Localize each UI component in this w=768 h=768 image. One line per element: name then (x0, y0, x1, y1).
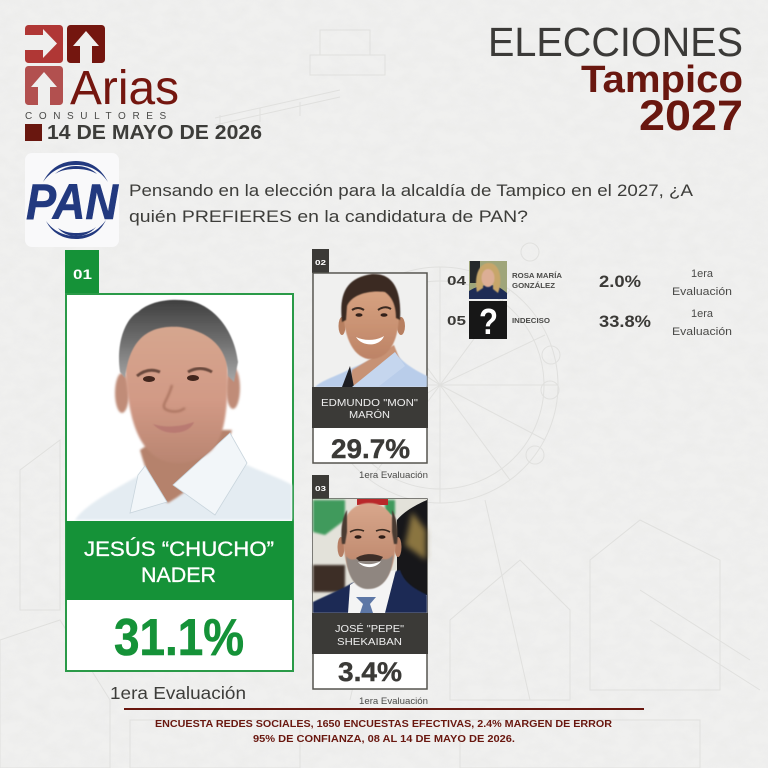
icon: up arrow tile (67, 25, 105, 63)
evaluation note: 1era Evaluación (110, 683, 246, 703)
evaluation note: 1era (691, 268, 714, 280)
card frame (313, 499, 427, 689)
evaluation note: 1era (691, 308, 714, 320)
survey question: quién PREFIERES en la candidatura de PAN? (129, 207, 528, 226)
portrait: José Shekaiban (313, 499, 427, 613)
row: candidate 04 (447, 261, 732, 299)
evaluation note: 1era Evaluación (359, 470, 428, 481)
row: undecided 05 (447, 301, 732, 342)
title: ELECCIONES (488, 19, 743, 65)
name band: EDMUNDO "MON" (321, 397, 418, 409)
rank tag 01: 01 (73, 266, 92, 282)
evaluation note: Evaluación (672, 286, 732, 298)
icon: light up arrow tile (25, 66, 63, 105)
footer methodology note: ENCUESTA REDES SOCIALES, 1650 ENCUESTAS EFECTIVAS, 2.4% MARGEN DE ERROR (155, 718, 612, 730)
icon: right arrow tile (25, 25, 63, 63)
name band: MARÓN (349, 408, 390, 421)
name: ROSA MARÍA (512, 271, 562, 280)
title: 2027 (639, 92, 743, 140)
rank tag 02: 02 (315, 258, 326, 267)
title (488, 19, 743, 140)
logo wordmark: Arias (70, 62, 179, 115)
portrait: Edmundo Marón (314, 274, 427, 387)
name band (66, 521, 293, 600)
PAN party logo: PAN (26, 174, 119, 230)
survey question: Pensando en la elección para la alcaldía de Tampico en el 2027, ¿A (129, 181, 694, 200)
rank tag 03 (312, 475, 329, 499)
panel: candidate 03 (312, 475, 428, 707)
evaluation note (672, 308, 732, 338)
footer methodology note: 95% DE CONFIANZA, 08 AL 14 DE MAYO DE 2026. (253, 733, 515, 745)
rank tag 03: 03 (315, 484, 326, 493)
percentage: 31.1% (114, 609, 244, 667)
card frame (66, 294, 293, 671)
evaluation note: Evaluación (672, 326, 732, 338)
name: GONZÁLEZ (512, 281, 556, 290)
portrait: Rosa María González (469, 261, 507, 299)
panel: candidate 01 (65, 250, 293, 703)
logo tagline: CONSULTORES (25, 111, 173, 122)
footer methodology note (124, 708, 644, 745)
name band (312, 613, 428, 654)
icon: question mark (469, 301, 507, 342)
panel: candidate 02 (312, 249, 428, 481)
icon: question mark: ? (479, 301, 498, 342)
name band (312, 387, 428, 428)
title: Tampico (581, 59, 743, 101)
percentage: 33.8% (599, 313, 651, 331)
percentage: 3.4% (338, 657, 402, 687)
card frame (313, 273, 427, 463)
name band: JESÚS “CHUCHO” (84, 538, 274, 561)
percentage: 2.0% (599, 273, 641, 291)
name: INDECISO (512, 318, 551, 325)
date with square marker: 14 DE MAYO DE 2026 (47, 121, 262, 144)
evaluation note: 1era Evaluación (359, 696, 428, 707)
name band: JOSÉ "PEPE" (335, 622, 404, 635)
rank tag 01 (65, 250, 99, 294)
rank 04: 04 (447, 274, 466, 288)
rank 05: 05 (447, 314, 466, 328)
name band: NADER (141, 564, 216, 587)
percentage: 29.7% (331, 434, 410, 464)
name band: SHEKAIBAN (337, 636, 402, 648)
logo: Arias Consultores (25, 25, 179, 122)
PAN party logo (25, 153, 119, 247)
rank tag 02 (312, 249, 329, 273)
name (512, 271, 562, 290)
evaluation note (672, 268, 732, 298)
portrait: Jesús Nader (75, 300, 292, 520)
survey question (129, 181, 694, 226)
